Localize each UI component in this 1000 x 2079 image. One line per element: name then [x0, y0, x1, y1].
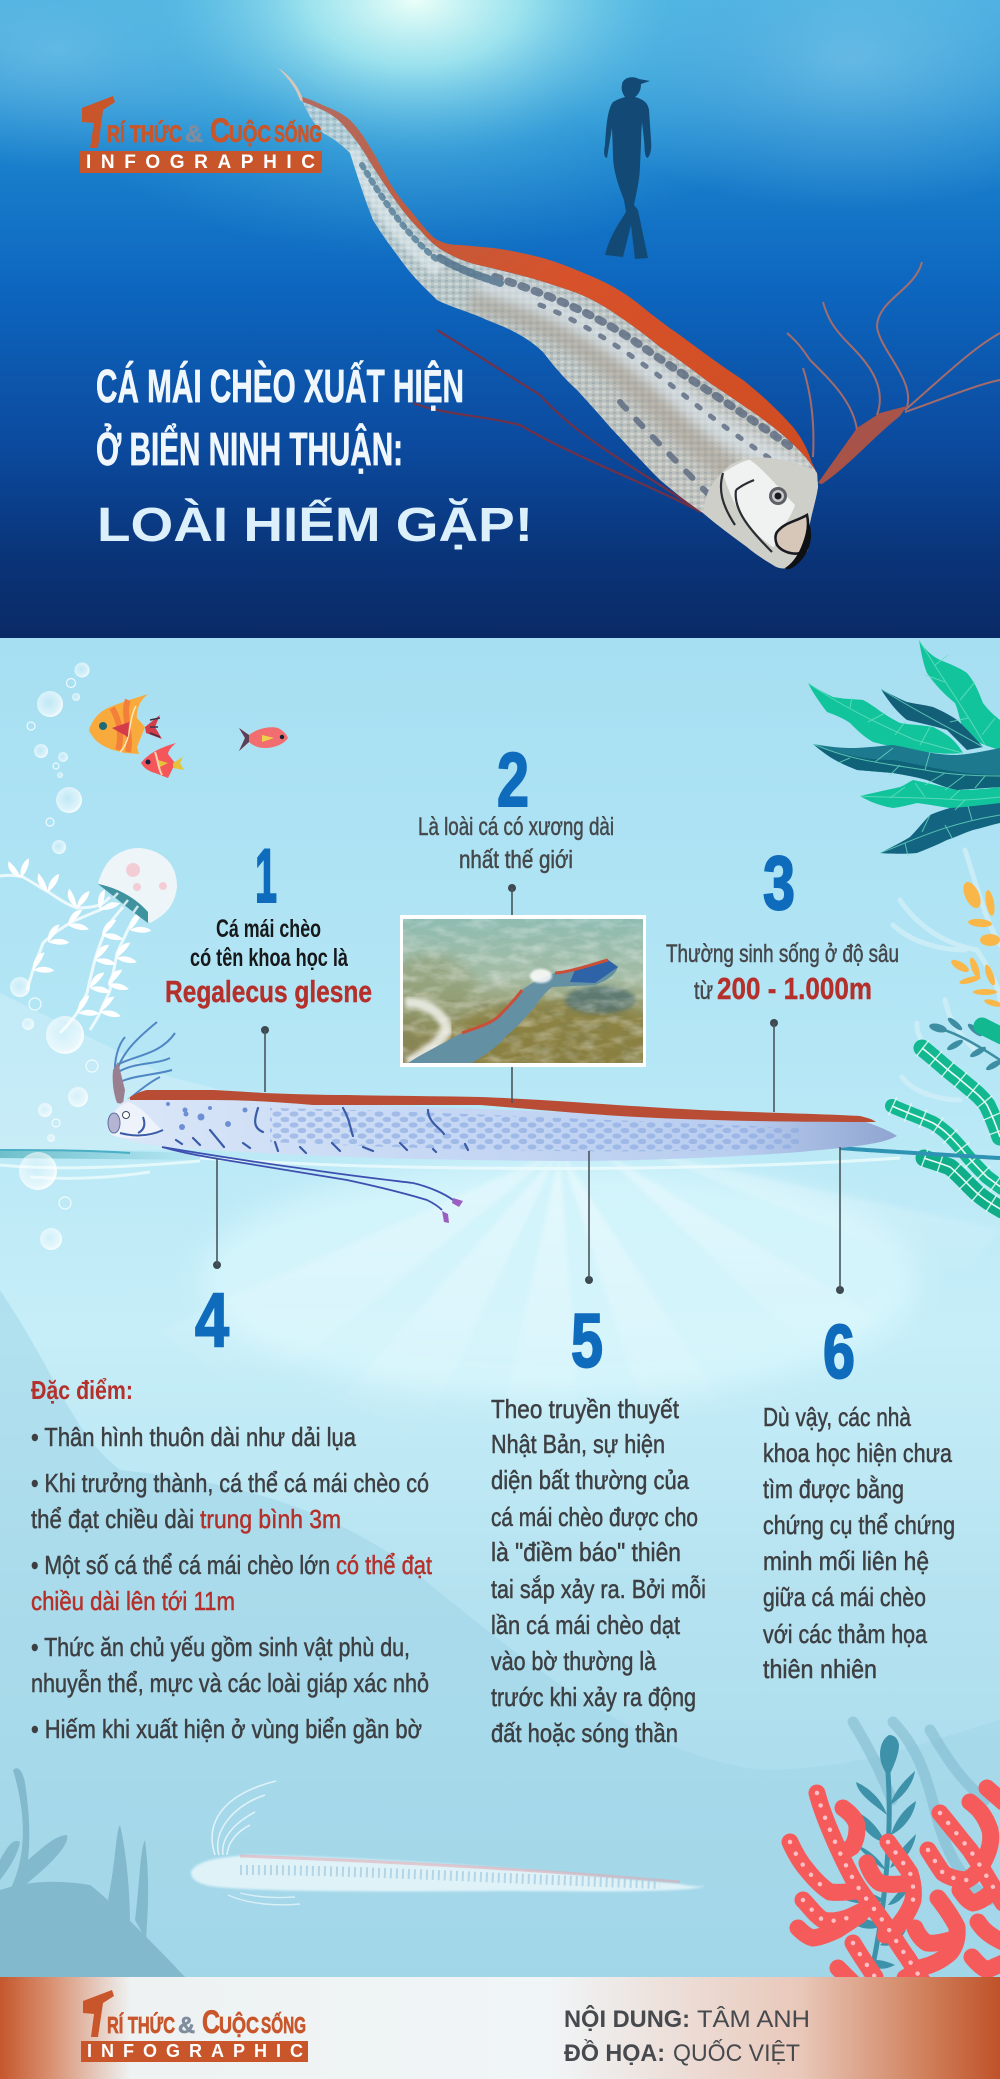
crest base: [113, 1062, 125, 1104]
leader 2: [508, 884, 516, 1103]
ocean background: [0, 925, 1000, 1706]
seaweed leaf 2: [808, 683, 963, 754]
icon: red fish: [239, 727, 288, 751]
leader lines: [213, 884, 844, 1294]
fish red dorsal: [130, 1090, 876, 1122]
water line: [0, 1148, 1000, 1178]
leader 4: [213, 1158, 221, 1269]
text block: legend: đất hoặc sóng thần: [491, 1718, 678, 1748]
icon: teal ghost plants: [853, 1722, 990, 1900]
heading: Đặc điểm:: [31, 1375, 133, 1405]
text block: legend: lần cá mái chèo dạt: [491, 1610, 681, 1640]
text block: legend: Theo truyền thuyết: [491, 1394, 680, 1424]
leader 5: [585, 1151, 593, 1284]
icon: orange fish: [89, 694, 162, 754]
icon: jellyfish: [0, 848, 177, 1033]
seaweed leaf 4: [813, 744, 1000, 790]
text block: science: khoa học hiện chưa: [763, 1438, 952, 1468]
bullet 1: • Thân hình thuôn dài như dải lụa: [31, 1422, 356, 1452]
label 3: [666, 940, 899, 1006]
text block: science: [763, 1402, 955, 1684]
jelly dome: [98, 848, 177, 923]
credit: graphics: [564, 2039, 800, 2067]
icon: small fish: [141, 743, 184, 778]
hero underwater background: [0, 0, 1000, 638]
credit: graphics: QUỐC VIỆT: [673, 2039, 800, 2067]
text block: science: giữa cá mái chèo: [763, 1582, 926, 1612]
label 1: Regalecus glesne: [165, 974, 372, 1009]
logo wordmark: SỐNG: [274, 120, 322, 148]
icon: teal plant: [845, 1735, 916, 1969]
leader 1: [261, 1026, 269, 1092]
label 3: 200 - 1.000m: [717, 971, 872, 1006]
fish markings: [176, 1108, 468, 1153]
bullet 3: có thể đạt: [336, 1550, 433, 1580]
footer logo wordmark: SỐNG: [261, 2011, 306, 2038]
illustration: main oarfish: [107, 1022, 897, 1223]
number 3: 3: [763, 841, 795, 926]
text block: legend: là "điềm báo" thiên: [491, 1537, 681, 1567]
footer logo wordmark: &: [178, 2012, 195, 2038]
jelly band: [98, 884, 148, 923]
icon: green kelp right: [892, 1016, 1000, 1210]
jelly leaves: [7, 854, 154, 1024]
logo wordmark: [108, 118, 322, 146]
footer logo wordmark: C: [202, 2004, 220, 2040]
leader 3: [770, 1019, 778, 1112]
logo wordmark: C: [210, 112, 230, 150]
logo wordmark: RÍ THỨC: [107, 120, 182, 148]
credit: content: TÂM ANH: [697, 2006, 810, 2033]
logo: top: [80, 96, 322, 173]
text block: science: minh mối liên hệ: [763, 1546, 929, 1576]
number 1: 1: [255, 834, 277, 919]
blue sprig: [928, 1016, 1000, 1072]
bullet 3: chiều dài lên tới 11m: [31, 1586, 235, 1616]
title line 2: Ở BIỂN NINH THUẬN:: [96, 423, 403, 475]
fish red dorsal fin: [302, 97, 817, 473]
fish head: [703, 457, 818, 569]
credit: content: NỘI DUNG:: [564, 2005, 690, 2033]
bullet 2: [31, 1468, 429, 1534]
bullet 4: nhuyễn thể, mực và các loài giáp xác nhỏ: [31, 1668, 429, 1698]
ghost plant right: [893, 850, 1000, 1100]
icon: diver silhouette: [604, 77, 651, 259]
text block: science: thiên nhiên: [763, 1654, 877, 1684]
text block: science: với các thảm họa: [763, 1619, 927, 1649]
credit: content: [564, 2005, 810, 2033]
footer logo infographic bar: INFOGRAPHIC: [87, 2041, 303, 2061]
leader 6: [836, 1147, 844, 1294]
seaweed leaf 5: [860, 780, 1000, 810]
number 4: 4: [195, 1278, 229, 1363]
panel: ocean body: [0, 638, 1000, 1982]
logo T mark: [82, 96, 115, 148]
bullet 3: [31, 1550, 433, 1616]
kelp stem 2: [892, 1106, 1000, 1188]
photo: oarfish in shallow water: [385, 915, 670, 1090]
text block: legend: trước khi xảy ra động: [491, 1682, 696, 1712]
footer logo T mark: [83, 1990, 114, 2037]
bullet 5: • Hiếm khi xuất hiện ở vùng biển gần bờ: [31, 1714, 422, 1744]
text block: legend: tai sắp xảy ra. Bởi mỗi: [491, 1574, 706, 1604]
footer logo wordmark: [107, 2004, 306, 2040]
text block: science: Dù vậy, các nhà: [763, 1402, 911, 1432]
fish tail spike: [278, 68, 304, 103]
jelly tentacles: [0, 875, 133, 1033]
title line 3: LOÀI HIẾM GẶP!: [97, 498, 533, 552]
footer background: [0, 1977, 1000, 2079]
numbers and labels: [165, 738, 899, 1395]
label 2: [418, 813, 614, 874]
panel: characteristics list: [31, 1375, 433, 1744]
title line 1: CÁ MÁI CHÈO XUẤT HIỆN: [96, 360, 464, 412]
credit: graphics: ĐỒ HỌA:: [564, 2039, 665, 2067]
footer logo wordmark: UỘC: [219, 2011, 259, 2038]
sun rays: [347, 1159, 942, 1302]
icon: orange sprigs right: [949, 879, 1000, 1008]
panel: hero header: [0, 0, 1000, 638]
kelp stem 3: [924, 1158, 1000, 1210]
bullet 4: [31, 1632, 429, 1698]
title: [96, 360, 533, 552]
fish pectoral ribbons: [413, 330, 701, 512]
logo infographic bar: INFOGRAPHIC: [86, 152, 315, 173]
label 2: Là loài cá có xương dài: [418, 813, 614, 841]
text block: legend: cá mái chèo được cho: [491, 1502, 698, 1532]
fish silver body: [290, 90, 830, 580]
bullet 2: thể đạt chiều dài: [31, 1504, 194, 1534]
coral branches: [790, 1788, 1000, 1982]
label 3: Thường sinh sống ở độ sâu: [666, 940, 899, 968]
seaweed leaf 1: [919, 640, 1000, 750]
text block: legend: vào bờ thường là: [491, 1646, 656, 1676]
text block: legend: [491, 1394, 706, 1748]
seaweed veins: [808, 640, 1000, 856]
footer logo wordmark: RÍ THỨC: [107, 2011, 175, 2038]
label 2: nhất thế giới: [459, 846, 573, 874]
number 2: 2: [497, 738, 529, 823]
logo: footer: [81, 1990, 308, 2062]
ventral filaments: [162, 1147, 453, 1210]
fish scale pattern: [270, 1108, 800, 1151]
crest filaments: [115, 1022, 175, 1100]
number 6: 6: [823, 1310, 855, 1395]
bullet 3: • Một số cá thể cá mái chèo lớn: [31, 1550, 330, 1580]
kelp stem 1: [922, 1048, 1000, 1137]
label 3: từ: [694, 977, 713, 1005]
number 5: 5: [571, 1299, 603, 1384]
bullet 2: • Khi trưởng thành, cá thể cá mái chèo có: [31, 1468, 429, 1498]
logo wordmark: UỘC: [229, 120, 271, 148]
text block: science: tìm được bằng: [763, 1474, 904, 1504]
text block: legend: diện bất thường của: [491, 1465, 689, 1495]
fish head: [107, 1102, 163, 1138]
icon: dark seabed silhouette: [0, 1768, 185, 1977]
icon: ghost oarfish: [191, 1781, 705, 1905]
kelp stem 0: [982, 1026, 1000, 1036]
footer: [0, 1977, 1000, 2079]
icon: seaweed top right: [808, 640, 1000, 856]
label 1: [165, 915, 372, 1009]
illustration: hero oarfish: [278, 68, 1000, 580]
seaweed leaf 6: [880, 803, 1000, 854]
decorative bubbles: [10, 662, 98, 1250]
label 1: Cá mái chèo: [216, 915, 321, 943]
icon: red coral: [790, 1788, 1000, 1982]
kelp ribs: [892, 1048, 1000, 1210]
fish body: [107, 1098, 897, 1161]
bullet 2: trung bình 3m: [200, 1504, 341, 1534]
text block: legend: Nhật Bản, sự hiện: [491, 1429, 665, 1459]
logo wordmark: &: [185, 121, 203, 148]
label 1: có tên khoa học là: [190, 944, 348, 972]
fish filaments right: [787, 262, 1000, 484]
text block: science: chứng cụ thể chứng: [763, 1510, 955, 1540]
bullet 4: • Thức ăn chủ yếu gồm sinh vật phù du,: [31, 1632, 410, 1662]
fish scale markings: [362, 165, 795, 498]
coral dots: [790, 1793, 993, 1982]
seaweed leaf 3: [881, 689, 983, 750]
